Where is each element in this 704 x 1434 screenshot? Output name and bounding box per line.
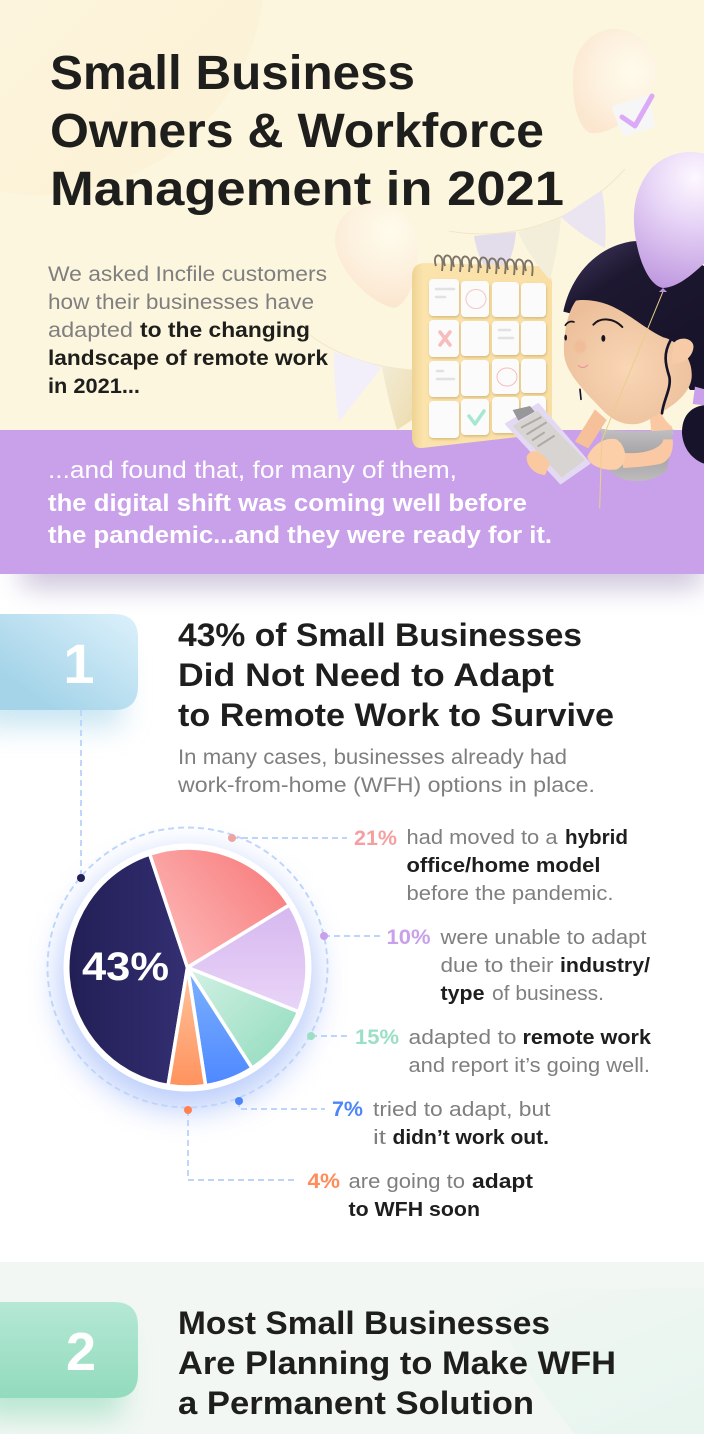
callout: 10% [386,926,650,1005]
callout: 7% [332,1098,551,1149]
banner text: ...and found that, for many of them, [48,457,457,484]
neck [648,402,673,434]
intro text block: adapted [48,318,133,342]
badge 1 shadow [0,645,122,727]
icon: check card [612,96,655,136]
calendar spiral rings [435,255,533,276]
callout: 7%: 7% [332,1098,363,1121]
heading 2: Most Small Businesses [178,1305,550,1341]
callout: 4%: adapt [472,1171,533,1193]
slice 10% [188,905,307,1012]
character [506,241,704,508]
slice 43% [68,854,188,1086]
connector from badge to pie [80,710,82,878]
subheading 1: In many cases, businesses already had [178,745,567,769]
callout: 21%: hybrid [565,827,628,849]
callout: 10%: type [440,983,484,1005]
banner text: the pandemic...and they were ready for it. [48,522,552,549]
icon: bunting strings [310,169,625,370]
garment [600,428,673,481]
callout: 21%: 21% [354,827,397,850]
balloon string [600,291,663,508]
clipboard [506,404,589,483]
callout: 10%: due to their [440,955,554,977]
side strand [662,340,671,413]
ear [672,339,693,364]
callout: 15%: adapted to [408,1027,516,1049]
title: Management in 2021 [50,163,564,216]
heading 2 [178,1305,616,1421]
face [564,300,692,424]
badge 2 [0,1302,138,1398]
leader dots [77,834,328,1114]
callout: 15% [355,1026,652,1077]
calendar tiles [429,279,546,438]
intro text block [48,262,328,398]
subheading 1 [177,745,595,797]
callout: 10%: 10% [386,926,431,949]
panel: header background [0,0,704,430]
facial features [564,319,622,368]
callout: 4%: are going to [348,1171,465,1193]
intro text block: how their businesses have [48,290,314,314]
illustration: balloons, bunting, calendar and character [310,29,704,508]
heading 2: Are Planning to Make WFH [178,1345,616,1381]
hair tie [693,387,704,405]
hands [527,451,550,475]
badge 2: 2 [66,1322,96,1382]
heading 1 [178,617,614,733]
heading 1: 43% of Small Businesses [178,617,582,653]
slice 15% [188,968,298,1068]
right arm [620,439,673,468]
panel: purple banner [0,430,704,574]
ponytail [682,405,704,464]
pie chart [48,828,328,1111]
subheading 1: work-from-home (WFH) options in place. [177,773,595,797]
slice 4% [168,968,206,1087]
callout: 15%: 15% [355,1026,399,1049]
callout: 7%: tried to adapt, but [373,1099,551,1121]
title: Owners & Workforce [50,105,544,158]
callout: 10%: of business. [492,983,604,1005]
icon: calendar [412,255,552,448]
callout: 4%: 4% [308,1170,340,1193]
callout: 4%: to WFH soon [348,1199,480,1221]
heading 1: Did Not Need to Adapt [178,657,554,693]
callout: 21% [354,827,628,905]
panel: section 1 [0,614,652,1221]
hair back [563,241,704,390]
title [50,47,564,216]
callout: 10%: industry/ [560,955,650,977]
badge 2 shadow [0,1335,122,1417]
icon: lilac balloon [634,152,704,292]
left arm [575,409,607,448]
icon: bunting flags in front [518,190,606,280]
intro text block: in 2021... [48,374,140,398]
band shadow [22,556,702,586]
pie chart: 43% [82,945,169,989]
callout: 15%: and report it’s going well. [408,1055,650,1077]
callout: 10%: were unable to adapt [439,927,647,949]
badge 1 [0,614,138,710]
callout: 21%: office/home model [406,855,600,877]
title: Small Business [50,47,415,100]
banner text [48,457,552,549]
callout: 7%: didn’t work out. [392,1127,549,1149]
callout: 21%: before the pandemic. [406,883,614,905]
badge 1: 1 [63,632,95,695]
panel: section 2 [0,1262,704,1434]
intro text block: landscape of remote work [48,346,328,370]
callout: 7%: it [373,1127,387,1149]
callout: 4% [308,1170,533,1221]
heading 1: to Remote Work to Survive [178,697,614,733]
calendar marks [436,289,517,424]
icon: bunting flags behind calendar [334,232,516,430]
intro text block: We asked Incfile customers [48,262,327,286]
slice 7% [188,968,252,1086]
banner text: the digital shift was coming well before [48,490,527,517]
callout: 15%: remote work [522,1027,652,1049]
slice 21% [150,848,289,968]
heading 2: a Permanent Solution [178,1385,534,1421]
icon: peach balloon top right [573,29,657,133]
intro text block: to the changing [140,318,310,342]
leader lines [188,838,380,1180]
icon: peach balloon centre [335,203,418,308]
callout: 21%: had moved to a [406,827,558,849]
